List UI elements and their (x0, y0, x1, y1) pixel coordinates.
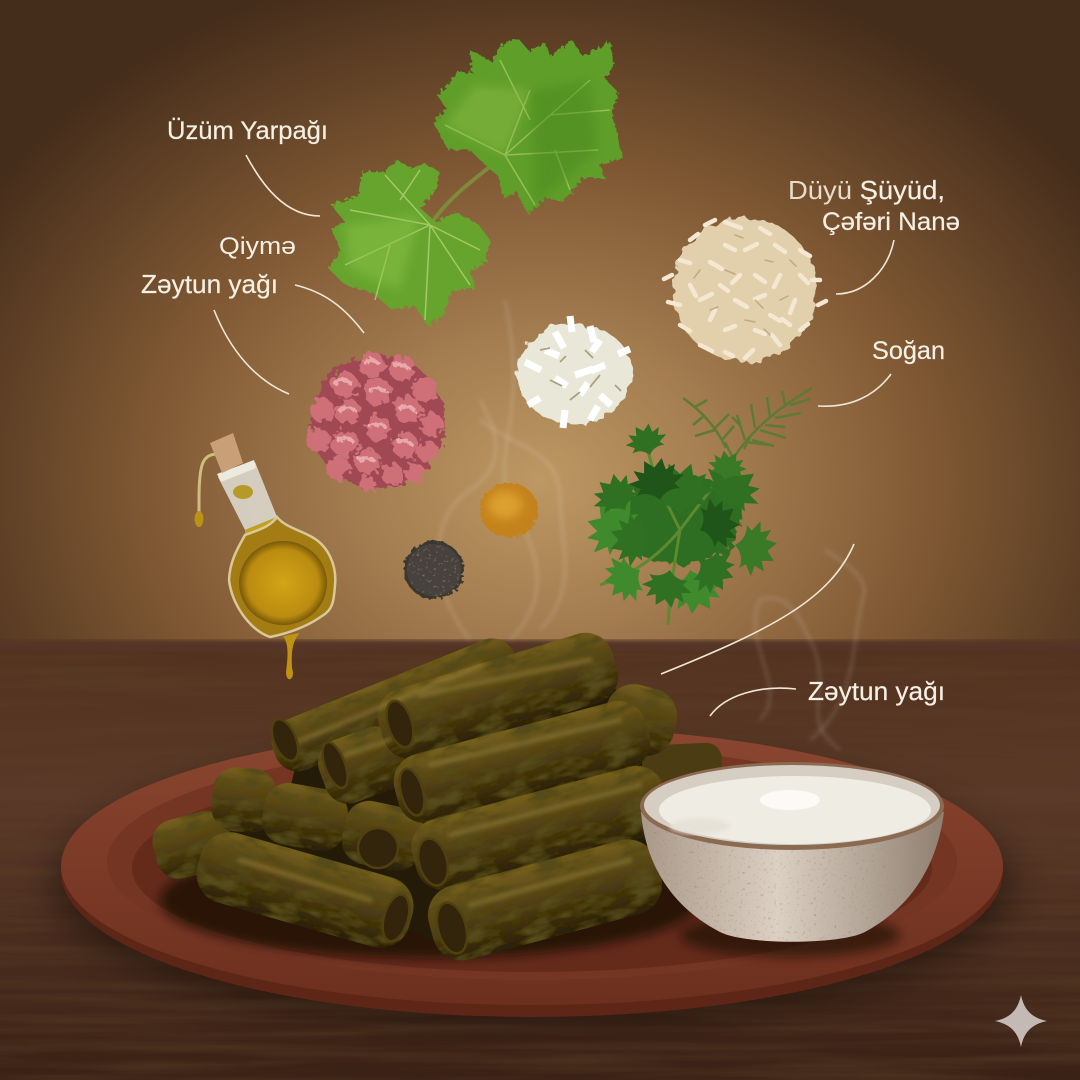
callout line: Qiymə (295, 285, 364, 333)
bottle body (229, 517, 335, 637)
roll back right (596, 678, 684, 762)
bottle lip (217, 460, 256, 482)
background wall (0, 0, 1080, 650)
ingredient: rice (664, 218, 826, 362)
oil drip from neck (199, 454, 218, 512)
callout line: Düyü (836, 240, 894, 294)
ingredient: turmeric (480, 483, 538, 537)
wooden table (0, 640, 1080, 1080)
fourth roll (421, 833, 669, 967)
ingredient: grape leaves (328, 38, 622, 326)
label: Zəytun yağı: Zəytun yağı (141, 269, 278, 299)
yogurt bowl (640, 762, 944, 957)
label dot (233, 485, 253, 499)
shadow backing (230, 660, 660, 945)
short roll centre (337, 796, 429, 876)
second roll (387, 695, 657, 829)
cork (210, 433, 243, 473)
oil in neck (245, 517, 290, 545)
short roll upper (311, 720, 413, 810)
meat highlights (335, 360, 414, 461)
label: Düyü Şüyüd: Düyü Şüyüd, (788, 175, 945, 205)
roll far left (148, 806, 236, 884)
oil drop below (283, 633, 300, 679)
upper grape leaf (433, 38, 622, 214)
ingredient: onion (517, 316, 633, 428)
roll left 2 (209, 765, 279, 835)
front left roll (189, 825, 421, 955)
roll left 3 (258, 779, 352, 855)
icon: sparkle (995, 995, 1047, 1047)
glossy highlights (240, 660, 640, 905)
label: Soğan: Soğan (872, 337, 945, 365)
roll far right (641, 742, 723, 782)
lower grape leaf (328, 160, 490, 326)
callout line: Soğan (818, 374, 891, 406)
top roll (371, 626, 625, 766)
plate (52, 727, 1012, 1025)
stuffed grape leaf rolls (148, 626, 723, 967)
steam wisps (438, 300, 865, 750)
stem (430, 155, 505, 225)
third roll (405, 760, 675, 896)
roll ends (267, 698, 472, 957)
label: Zəytun yağı right: Zəytun yağı (808, 676, 945, 706)
roll back long (264, 631, 526, 779)
oil highlight (239, 541, 327, 625)
parsley stems (600, 435, 730, 625)
callout line: Zəytun yağı right (710, 688, 796, 716)
callout line: long right (661, 544, 854, 674)
ingredient: minced meat (306, 352, 445, 492)
ingredient: olive oil bottle (194, 433, 335, 679)
dill (683, 388, 812, 465)
callout line: Zəytun yağı (214, 310, 289, 394)
label: Qiymə: Qiymə (219, 233, 296, 260)
callout line: Üzüm Yarpağı (246, 155, 320, 216)
ingredient: black pepper (404, 541, 464, 599)
label: Çəfəri Nanə: Çəfəri Nanə (822, 208, 960, 236)
ingredient: herbs (575, 388, 812, 625)
label: Üzüm Yarpağı: Üzüm Yarpağı (167, 117, 328, 145)
parsley mass (618, 475, 742, 565)
bottle neck (218, 462, 277, 530)
meat lumps (306, 352, 444, 492)
parsley leaves (575, 420, 780, 619)
